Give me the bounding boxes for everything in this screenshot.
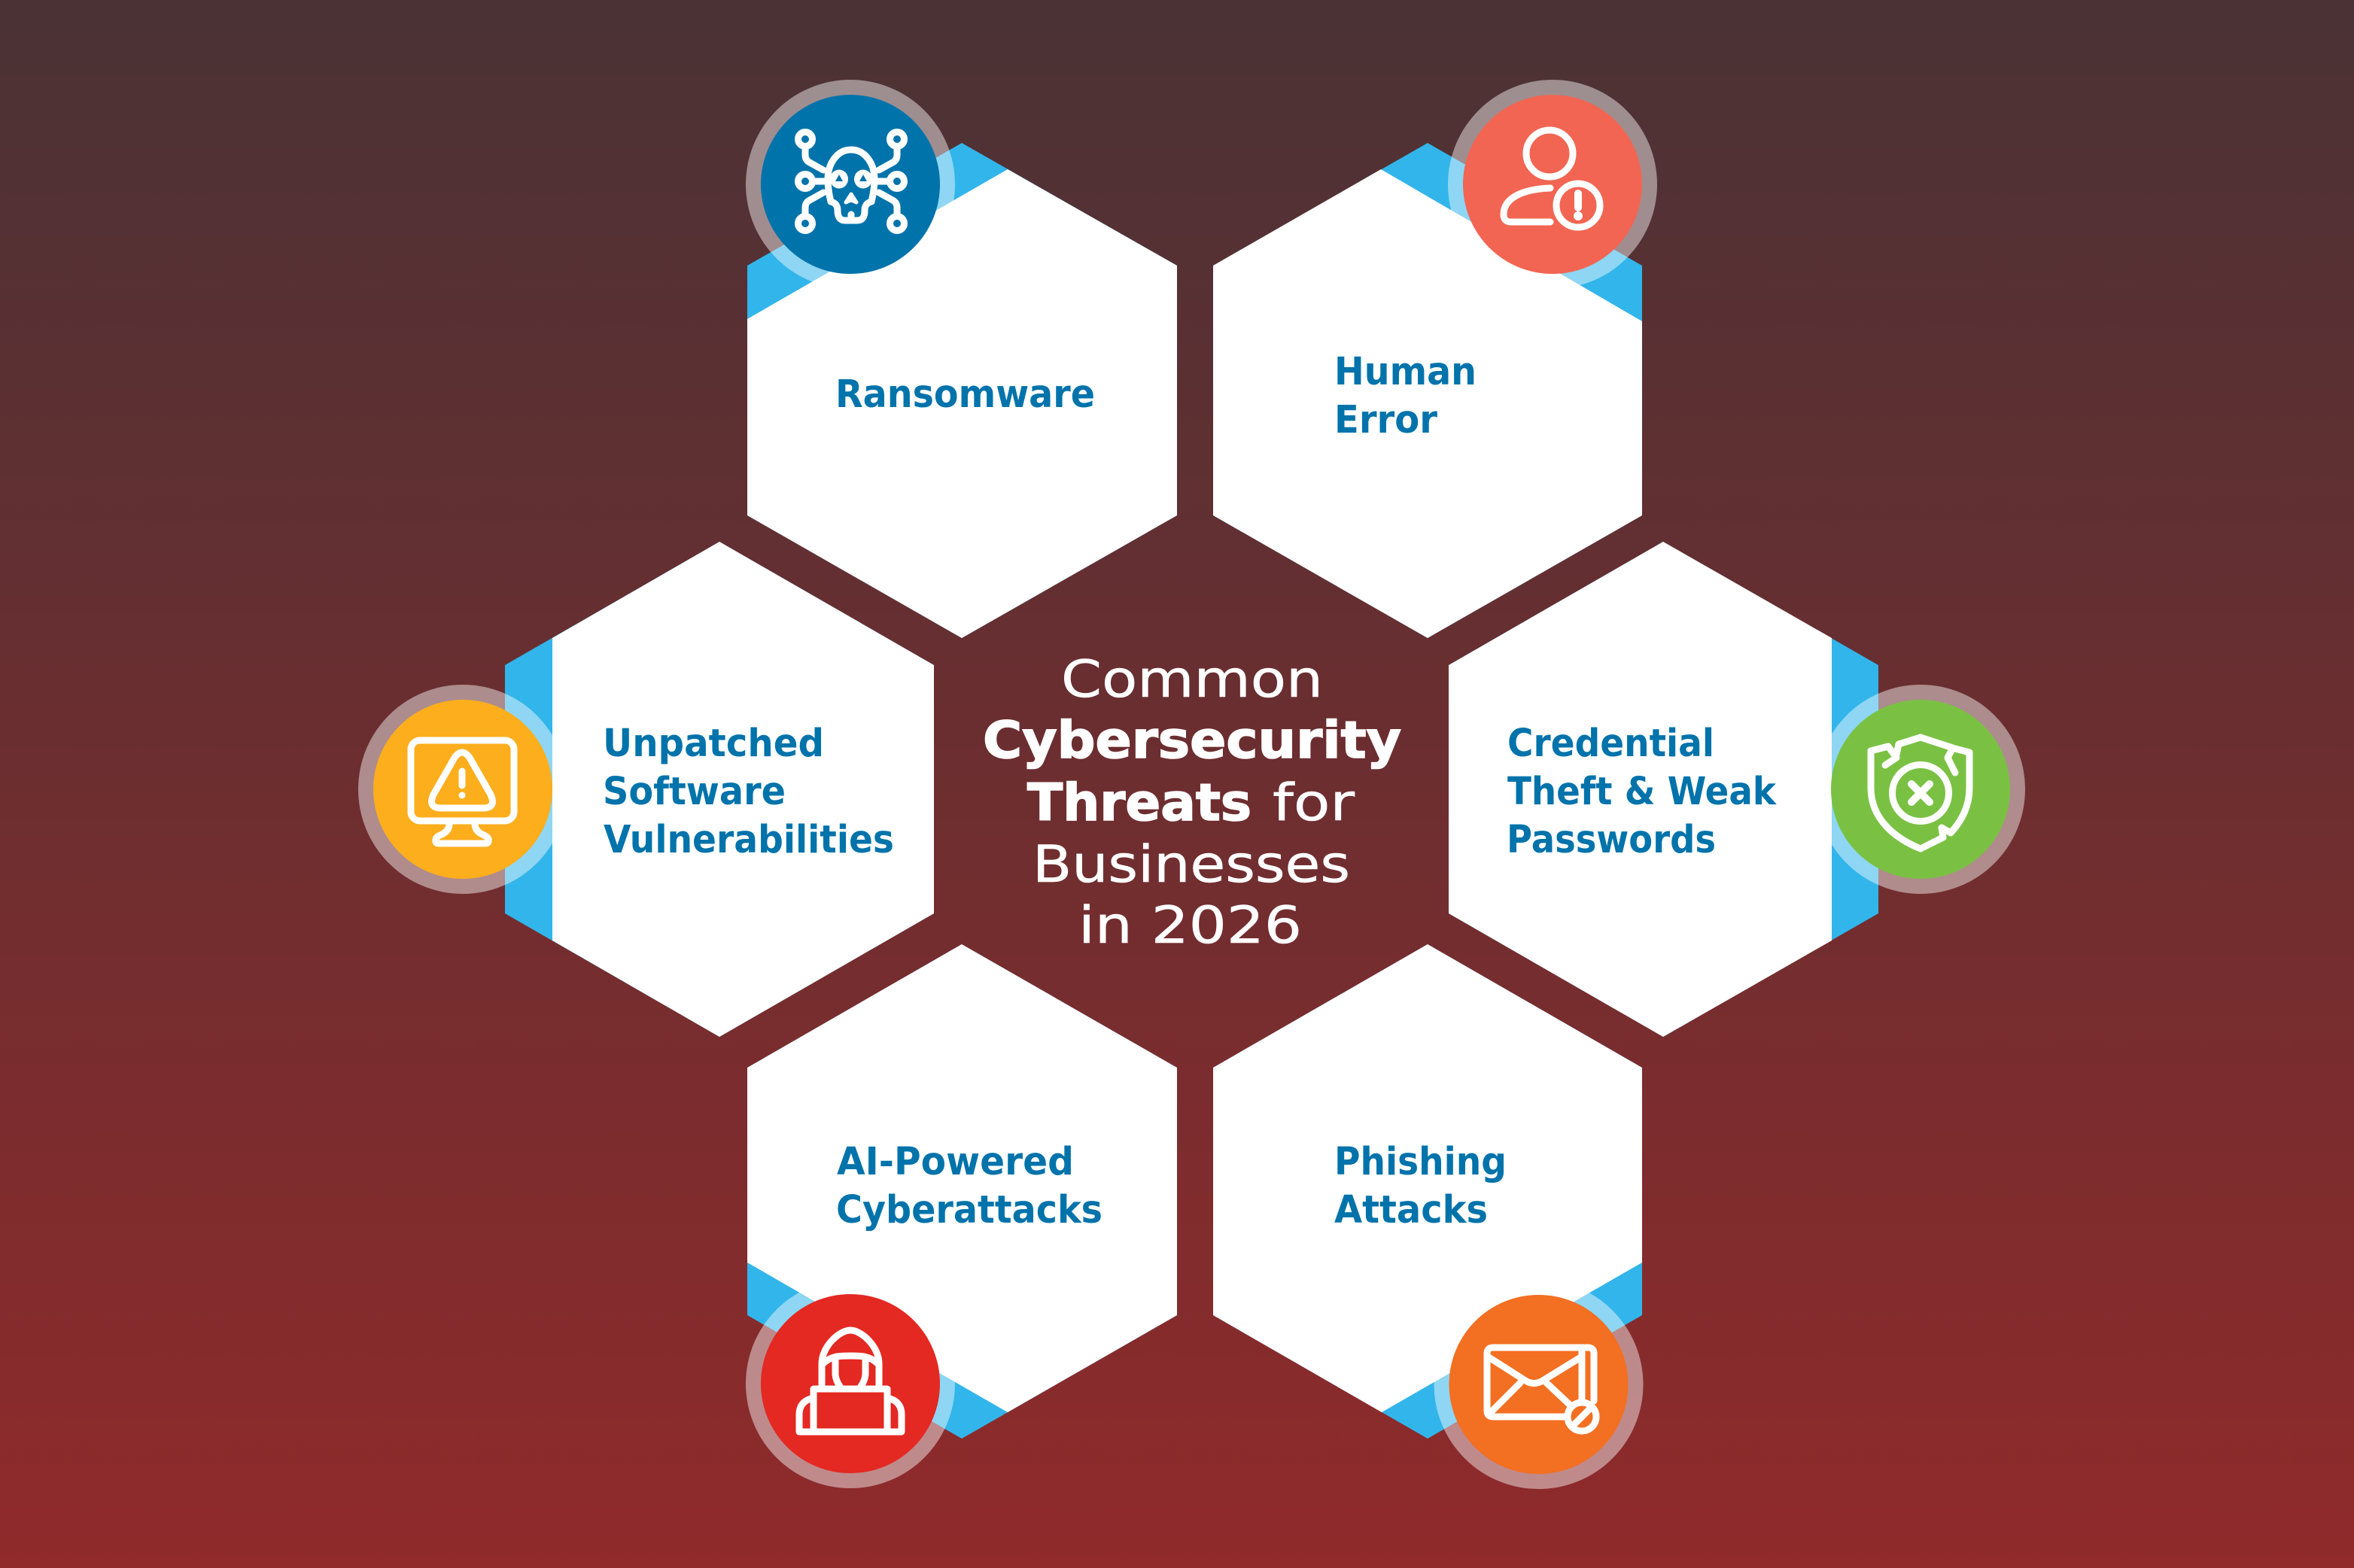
label: Human Error: Human	[1334, 350, 1477, 394]
icon badge: ransomware skull	[746, 80, 955, 289]
label: Credential Theft & Weak Passwords: Theft & Weak	[1507, 770, 1777, 814]
icon badge: unpatched software monitor	[358, 685, 567, 894]
label: Unpatched Software Vulnerabilities: Software	[603, 770, 786, 814]
icon badge: human error person	[1448, 80, 1657, 289]
title: for	[1273, 773, 1355, 833]
label: AI-Powered Cyberattacks: Cyberattacks	[836, 1188, 1102, 1232]
panel: ransomware hexagon	[747, 143, 1177, 638]
label: Phishing Attacks: Phishing	[1334, 1140, 1507, 1184]
label: AI-Powered Cyberattacks: AI-Powered	[837, 1140, 1074, 1184]
label: Credential Theft & Weak Passwords: Credential	[1507, 722, 1714, 766]
icon: skull with circuit nodes	[798, 132, 905, 230]
icon: cracked shield with x	[1871, 737, 1969, 849]
panel: phishing attacks hexagon	[1213, 944, 1642, 1439]
icon: hooded hacker at laptop	[799, 1330, 902, 1432]
icon: envelope with block sign	[1487, 1348, 1596, 1431]
label: Ransomware: Ransomware	[835, 372, 1095, 417]
label: Credential Theft & Weak Passwords: Passwords	[1507, 818, 1716, 862]
title	[983, 650, 1401, 956]
title: in 2026	[1078, 896, 1302, 956]
label: Credential Theft & Weak Passwords	[1507, 722, 1777, 862]
icon badge: phishing envelope	[1434, 1280, 1644, 1489]
panel: human error hexagon	[1213, 143, 1642, 638]
icon: person with alert	[1504, 130, 1600, 227]
title: Cybersecurity	[983, 711, 1401, 770]
label: AI-Powered Cyberattacks	[836, 1140, 1102, 1232]
title: Threats	[1027, 773, 1252, 833]
panel: unpatched software hexagon	[505, 542, 934, 1037]
icon badge: AI-powered cyberattacks hacker	[746, 1279, 955, 1488]
label: Unpatched Software Vulnerabilities: Unpatched	[603, 722, 824, 766]
label: Phishing Attacks	[1334, 1140, 1507, 1232]
icon: monitor with warning triangle	[411, 740, 514, 843]
label: Unpatched Software Vulnerabilities: Vulnerabilities	[604, 818, 894, 862]
label: Phishing Attacks: Attacks	[1334, 1188, 1488, 1232]
title: Common	[1061, 650, 1323, 710]
label: Unpatched Software Vulnerabilities	[603, 722, 894, 862]
title: Businesses	[1033, 835, 1350, 895]
label: Human Error	[1334, 350, 1477, 442]
panel: credential theft hexagon	[1449, 542, 1878, 1037]
label: Human Error: Error	[1334, 398, 1437, 442]
icon badge: credential theft shield	[1816, 685, 2025, 894]
panel: AI-powered cyberattacks hexagon	[747, 944, 1177, 1439]
